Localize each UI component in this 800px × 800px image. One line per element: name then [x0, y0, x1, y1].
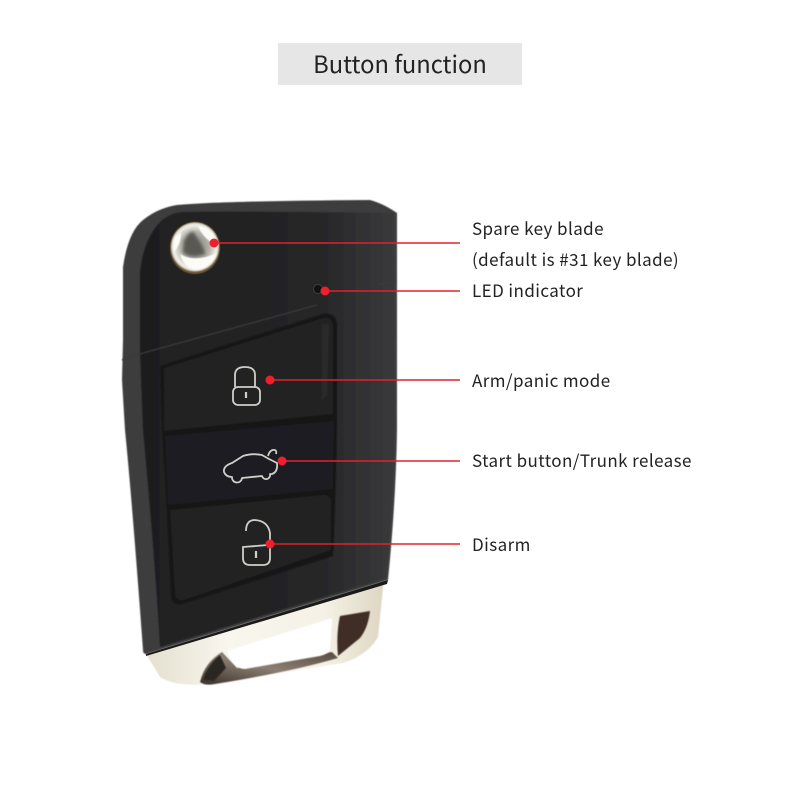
label: spare key blade: (default is #31 key blade): [472, 246, 679, 271]
key body: [122, 200, 397, 656]
label: spare key blade: [472, 215, 679, 271]
label: LED indicator: LED indicator: [472, 277, 583, 302]
icon: chrome pin: [170, 222, 220, 274]
button: arm: [164, 318, 333, 431]
body seam highlight: [122, 282, 396, 360]
callout line: arm/panic mode: [266, 376, 460, 384]
icon: padlock open: [243, 520, 270, 565]
button: trunk: [165, 421, 334, 505]
callout line: disarm: [266, 540, 460, 548]
callout line: spare key blade: [210, 238, 460, 248]
callout line: LED indicator: [320, 286, 460, 296]
title: Button function: [313, 46, 487, 80]
icon: LED indicator: [314, 284, 322, 294]
label: arm/panic mode: Arm/panic mode: [472, 367, 611, 392]
icon: car with open trunk: [224, 450, 277, 483]
title: [278, 43, 522, 85]
icon: padlock closed: [233, 367, 260, 405]
label: disarm: Disarm: [472, 531, 531, 556]
callout line: start/trunk: [278, 456, 460, 466]
label: start button/trunk release: Start button/Trunk release: [472, 447, 692, 472]
button: disarm: [170, 495, 331, 600]
label: spare key blade: Spare key blade: [472, 215, 604, 240]
metal key base: [145, 578, 384, 685]
buttons panel: [160, 314, 337, 604]
